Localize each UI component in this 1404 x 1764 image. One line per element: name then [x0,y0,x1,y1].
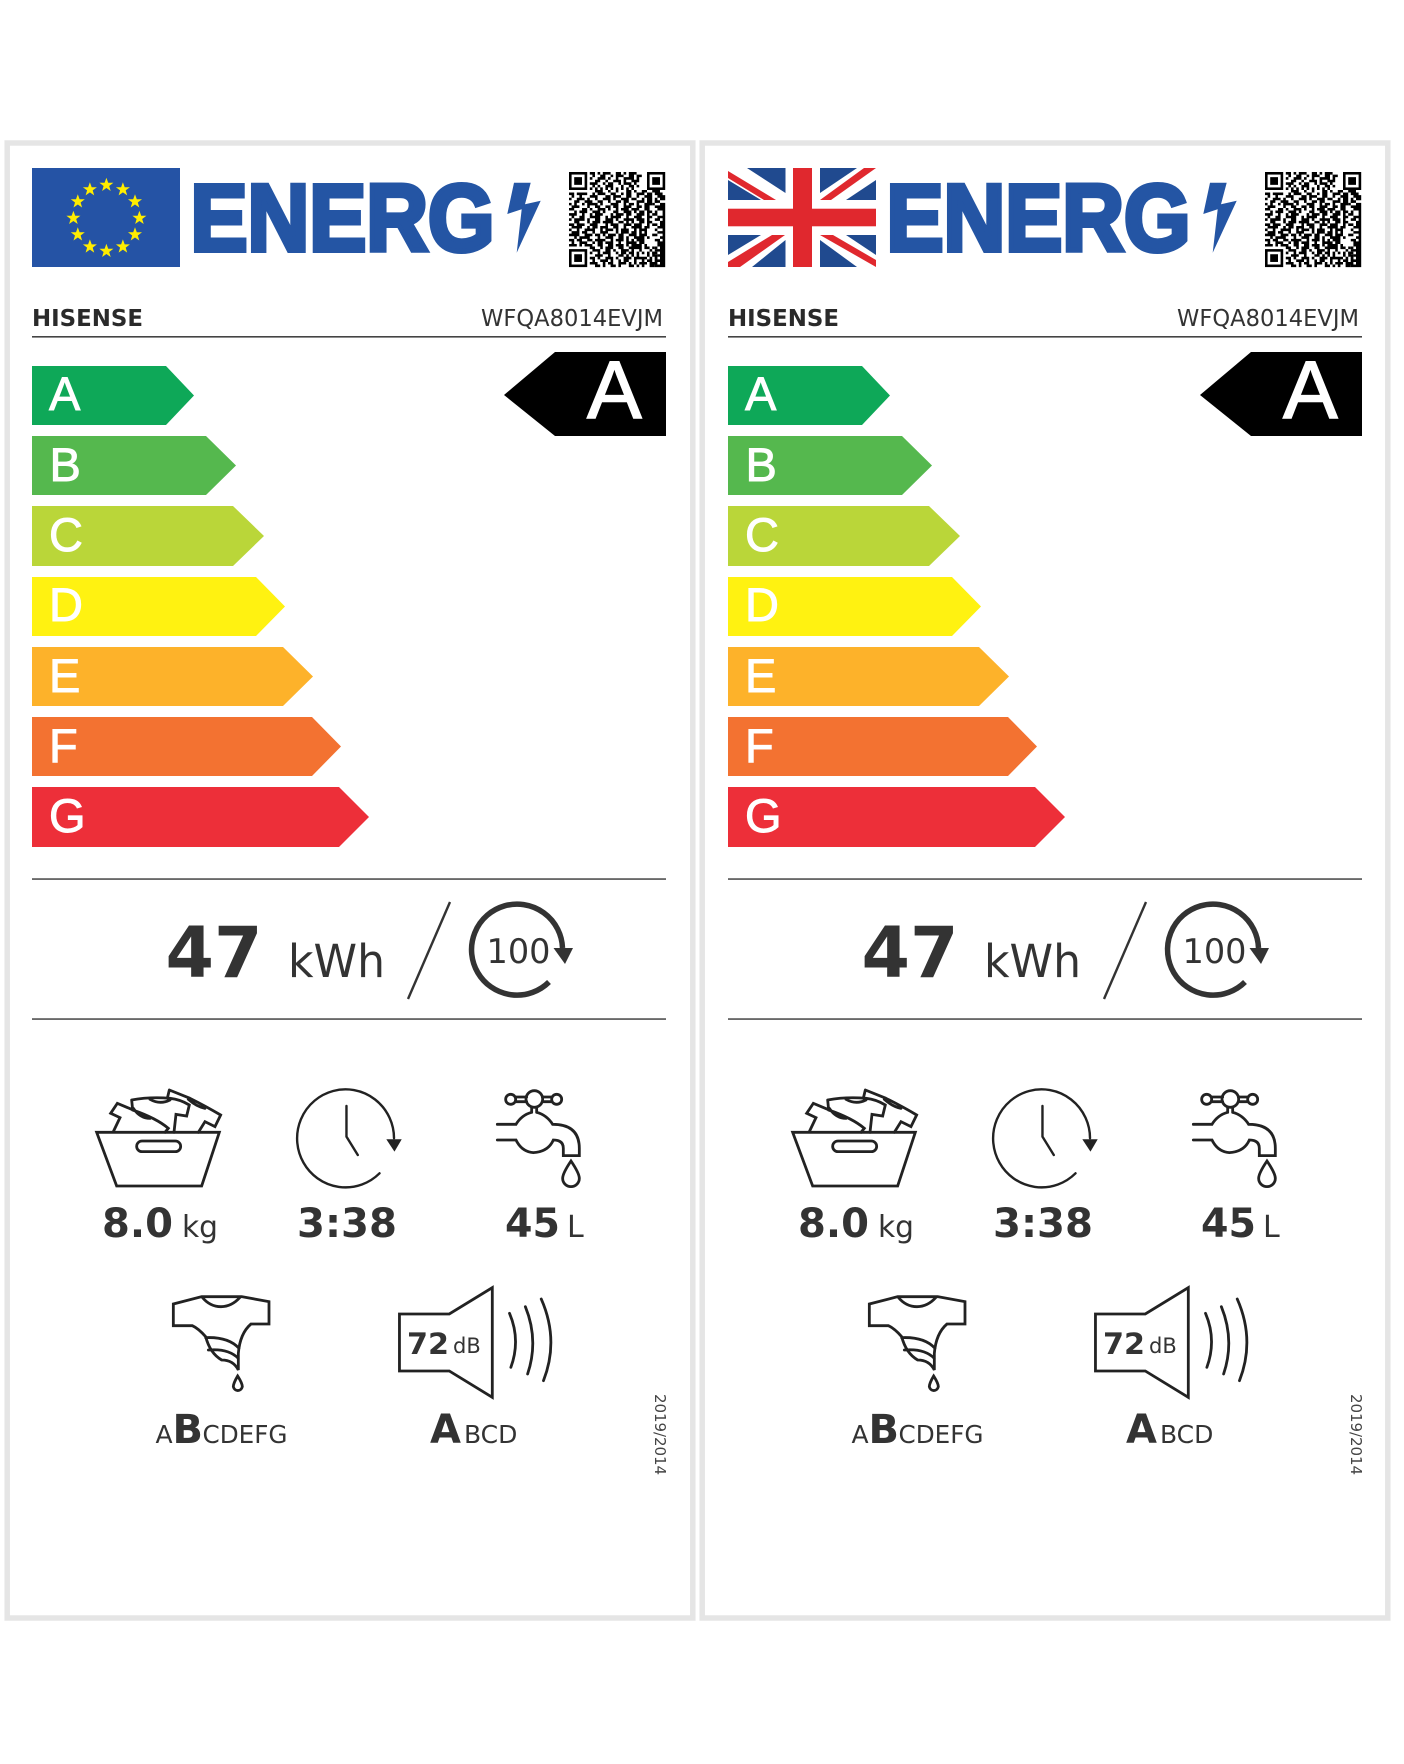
icon: energy bolt [1203,183,1237,253]
arrow B: B [746,438,777,491]
icon: speaker 72 dB: dB [453,1334,481,1358]
arrow B: B [50,438,81,491]
energy scale arrows [728,366,1065,847]
icon: speaker 72 dB: 72 [407,1327,449,1361]
arrow E [32,647,313,706]
arrow F: F [745,719,774,772]
energy scale arrows [32,366,369,847]
icon: water tap [497,1091,579,1187]
icon: spin-drying shirt [173,1297,269,1391]
duration 3:38: 3:38 [297,1201,397,1247]
icon: UK flag [728,168,876,267]
duration 3:38: 3:38 [993,1201,1093,1247]
icon: 100 cycles [1168,904,1269,995]
brand name: HISENSE [32,306,143,332]
panel: EU energy label [7,143,693,1618]
arrow C [32,506,264,566]
arrow D [728,577,981,636]
rating badge A: A [1283,345,1338,436]
arrow G: G [49,789,86,842]
arrow B [728,436,932,495]
icon: clock [993,1089,1098,1187]
arrow D [32,577,285,636]
spin class ABCDEFG: B [172,1407,203,1453]
slash [1104,902,1146,999]
arrow D: D [745,578,779,631]
arrow D: D [49,578,83,631]
energy value 47 kWh: kWh [984,935,1081,988]
arrow F [728,717,1037,776]
water 45 L: 45 [505,1201,560,1247]
arrow C [728,506,960,566]
noise class ABCD: ABCD [1126,1407,1213,1453]
arrow C: C [49,508,83,561]
icon: laundry basket [793,1090,917,1186]
arrow G [728,787,1065,847]
panel content [728,166,1365,1475]
water 45 L: 45 [1201,1201,1256,1247]
icon: speaker 72 dB: dB [1149,1334,1177,1358]
arrow G: G [745,789,782,842]
icon: water tap [1193,1091,1275,1187]
QR code [569,173,665,266]
water 45 L: L [567,1210,584,1245]
model number: WFQA8014EVJM [481,306,663,332]
energy value 47 kWh [862,912,1081,994]
arrow A [32,366,194,425]
spin class ABCDEFG: B [868,1407,899,1453]
icon: speaker 72 dB: 72 [1103,1327,1145,1361]
rating badge A: A [587,345,642,436]
spin class ABCDEFG: A [852,1420,869,1449]
icon: 100 cycles: 100 [1182,932,1246,972]
icon: EU flag [32,168,180,267]
arrow C: C [745,508,779,561]
rating badge A [504,345,666,436]
load 8.0 kg [798,1201,914,1247]
arrow A: A [745,367,777,420]
arrow F [32,717,341,776]
icon: clock [297,1089,402,1187]
icon: speaker 72 dB [1095,1288,1247,1397]
brand name: HISENSE [728,306,839,332]
icon: 100 cycles: 100 [486,932,550,972]
arrow B [32,436,236,495]
spin class ABCDEFG: CDEFG [898,1420,984,1449]
icon: laundry basket [97,1090,221,1186]
heading: ENERG: ENERG [190,166,494,272]
panel: UK energy label [702,143,1388,1618]
load 8.0 kg: 8.0 [102,1201,173,1247]
energy value 47 kWh: 47 [862,912,958,994]
load 8.0 kg [102,1201,218,1247]
water 45 L: L [1263,1210,1280,1245]
regulation number: 2019/2014 [1347,1394,1365,1475]
energy value 47 kWh [166,912,385,994]
heading: ENERG: ENERG [886,166,1190,272]
arrow E: E [49,649,80,702]
energy value 47 kWh: 47 [166,912,262,994]
icon: spin-drying shirt [869,1297,965,1391]
load 8.0 kg: 8.0 [798,1201,869,1247]
slash [408,902,450,999]
load 8.0 kg: kg [182,1210,218,1245]
icon: 100 cycles [472,904,573,995]
spin class ABCDEFG: A [156,1420,173,1449]
energy value 47 kWh: kWh [288,935,385,988]
rating badge A [1200,345,1362,436]
panel frame [7,143,693,1618]
icon: energy bolt [507,183,541,253]
regulation number: 2019/2014 [651,1394,669,1475]
arrow G [32,787,369,847]
model number: WFQA8014EVJM [1177,306,1359,332]
panel frame [702,143,1388,1618]
QR code [1265,173,1361,266]
arrow E: E [745,649,776,702]
arrow A: A [49,367,81,420]
load 8.0 kg: kg [878,1210,914,1245]
arrow A [728,366,890,425]
arrow E [728,647,1009,706]
spin class ABCDEFG: CDEFG [202,1420,288,1449]
icon: speaker 72 dB [399,1288,551,1397]
arrow F: F [49,719,78,772]
noise class ABCD: ABCD [430,1407,517,1453]
